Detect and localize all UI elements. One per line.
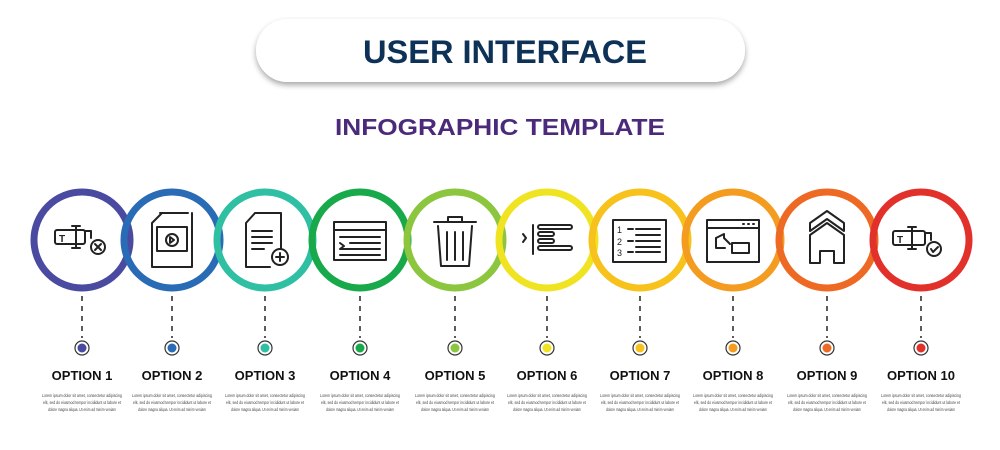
icon: browser move [707,220,759,262]
icon: video file [152,213,192,267]
icon: text check: T [897,235,903,246]
option labels: OPTION 7 [610,368,670,383]
option labels: OPTION 6 [517,368,577,383]
circle 3 [217,192,313,288]
subtitle: INFOGRAPHIC TEMPLATE [335,114,665,140]
title pill: USER INTERFACE [363,34,647,70]
circle 6 [499,192,595,288]
circle 7 [592,192,688,288]
icon: trash [434,217,476,266]
option labels: OPTION 8 [703,368,763,383]
option labels: OPTION 3 [235,368,295,383]
icon: numbered list: 2 [617,237,622,247]
icon: indent [523,225,572,254]
option labels: OPTION 1 [52,368,112,383]
connectors and dots [82,296,921,338]
icon: text check [893,227,941,256]
option labels: OPTION 9 [797,368,857,383]
option labels: OPTION 4 [330,368,391,383]
option labels: OPTION 2 [142,368,202,383]
icon: numbered list: 1 [617,225,622,235]
title pill [256,19,745,82]
icon: numbered list [613,220,666,262]
circle 1 [34,192,130,288]
option labels: OPTION 10 [887,368,955,383]
circle 9 [779,192,875,288]
icon: text cancel [55,226,105,254]
description texts [42,393,961,412]
icon: text cancel: T [59,234,65,245]
icon: up chevron [810,211,844,263]
icon: add document [246,213,288,267]
circle 8 [685,192,781,288]
circle 10 [873,192,969,288]
circle 5 [407,192,503,288]
circle 2 [124,192,220,288]
icon: numbered list: 3 [617,248,622,258]
option labels [52,368,955,383]
icon: browser code [334,222,386,260]
circle 4 [312,192,408,288]
option labels: OPTION 5 [425,368,485,383]
